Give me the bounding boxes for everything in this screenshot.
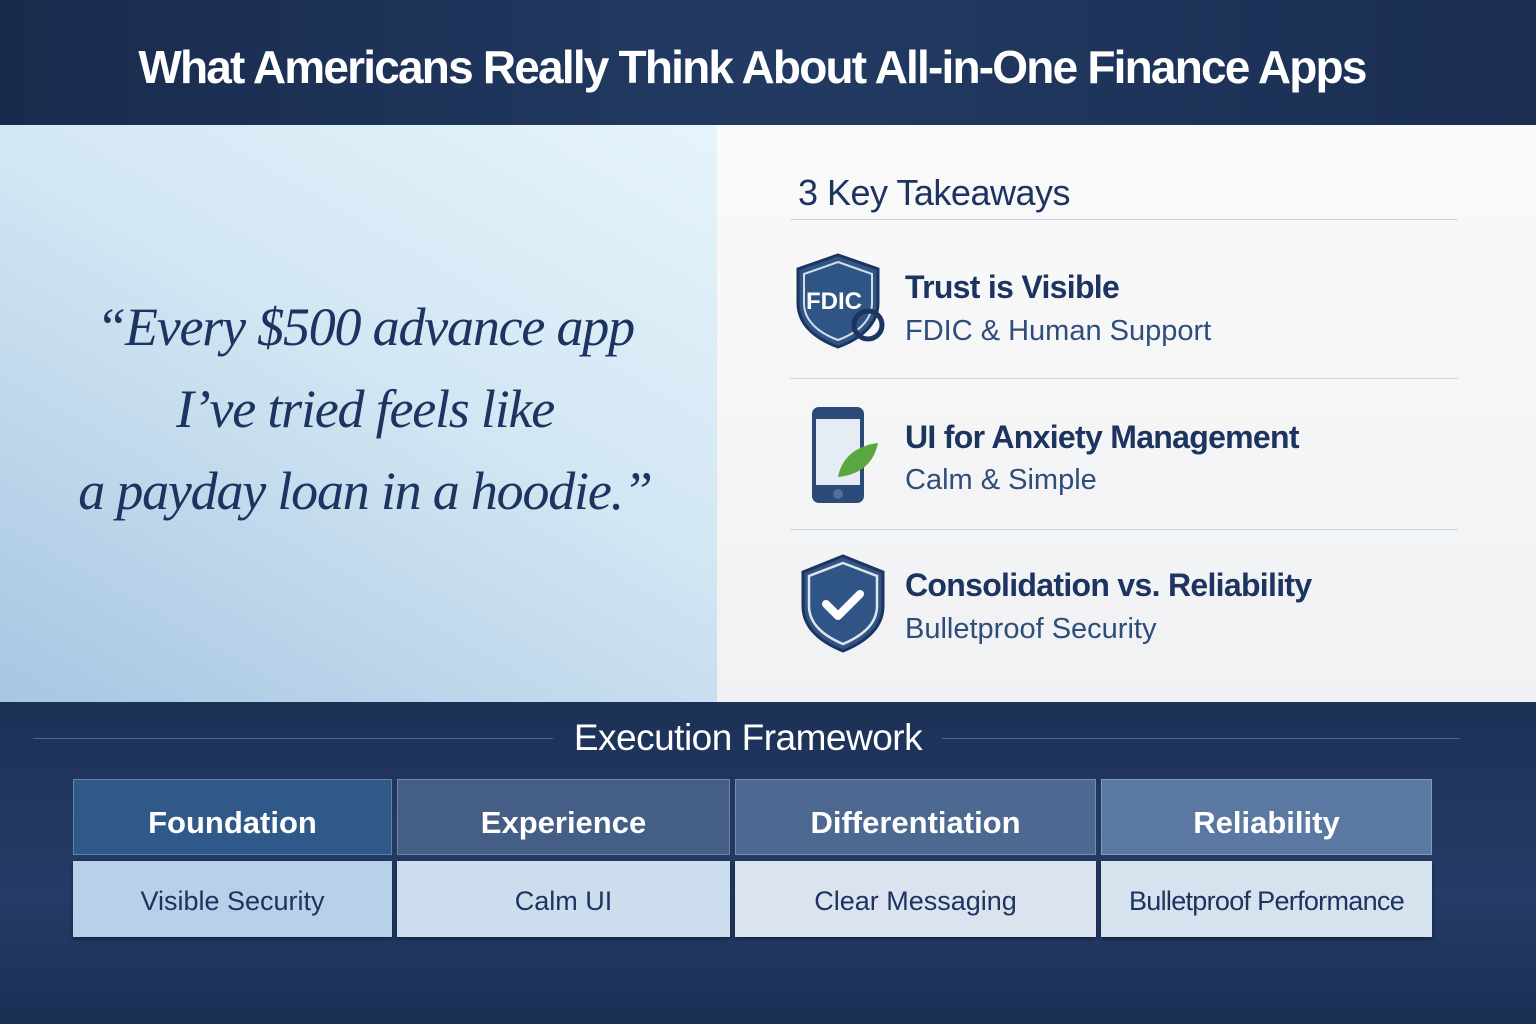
column: Reliability	[1101, 779, 1432, 855]
framework table: Clear Messaging	[814, 886, 1017, 916]
quote text: a payday loan in a hoodie.”	[78, 461, 652, 521]
icon: check shield	[802, 554, 884, 653]
quote text: “Every $500 advance app	[96, 297, 634, 357]
icon: FDIC shield	[796, 253, 884, 349]
takeaways heading: 3 Key Takeaways	[798, 172, 1070, 213]
title: What Americans Really Think About All-in-One Finance Apps	[138, 41, 1366, 93]
text: Calm & Simple	[905, 464, 1097, 496]
icon: FDIC shield: FDIC	[806, 288, 862, 315]
text: FDIC & Human Support	[905, 315, 1211, 347]
column: Differentiation	[735, 779, 1096, 855]
column: Foundation	[73, 779, 392, 855]
column: Experience	[397, 779, 730, 855]
framework table: Bulletproof Performance	[1129, 886, 1404, 916]
framework table	[72, 779, 1434, 940]
item 2: UI for Anxiety Management	[905, 419, 1299, 455]
item 3: Consolidation vs. Reliability	[905, 567, 1311, 603]
text: Bulletproof Security	[905, 613, 1156, 645]
quote text: I’ve tried feels like	[176, 379, 554, 439]
panel: takeaways	[717, 125, 1536, 702]
icon: phone with leaf	[812, 407, 878, 503]
column: Reliability: Reliability	[1193, 805, 1340, 840]
title	[0, 0, 1536, 125]
panel: execution framework	[0, 702, 1536, 1024]
column: Foundation: Foundation	[148, 805, 317, 840]
framework heading: Execution Framework	[574, 717, 922, 758]
quote text	[78, 297, 652, 521]
column: Experience: Experience	[481, 805, 646, 840]
framework table: Visible Security	[140, 886, 325, 916]
column: Differentiation: Differentiation	[810, 805, 1021, 840]
item 1: Trust is Visible	[905, 269, 1119, 305]
panel: quote	[0, 125, 717, 702]
framework table: Calm UI	[515, 886, 612, 916]
